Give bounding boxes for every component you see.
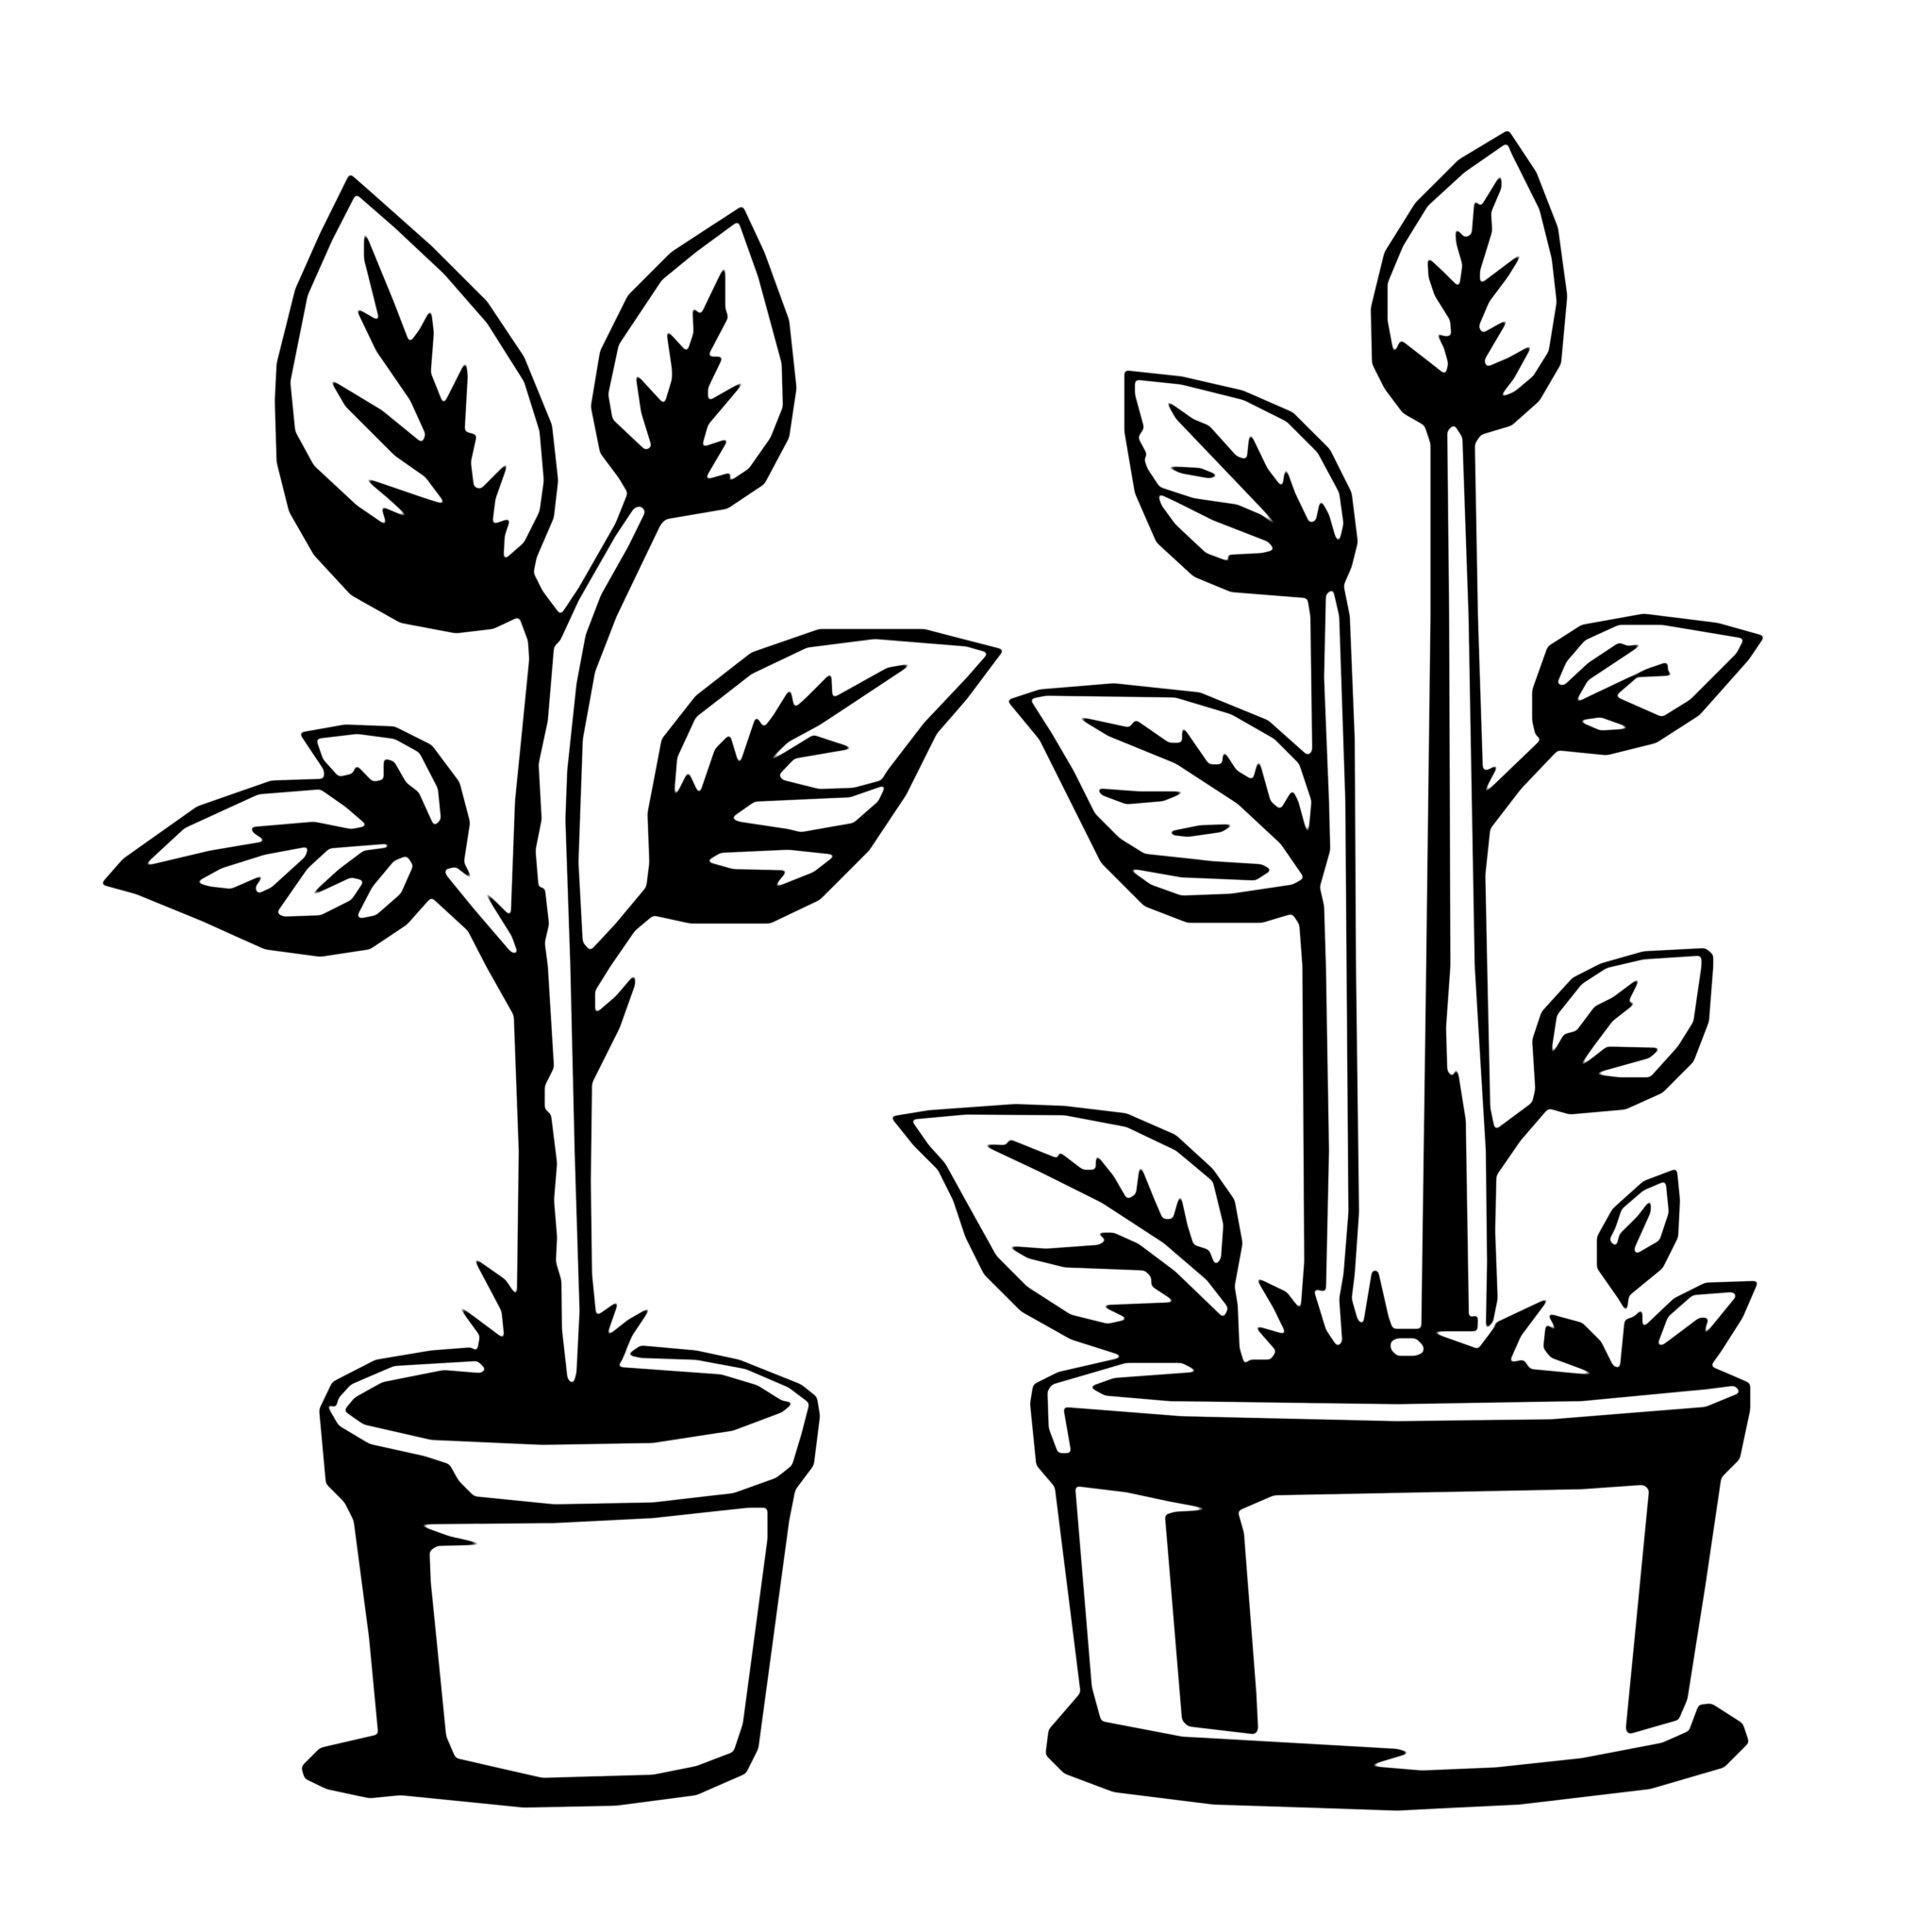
right plant: upper side leaf interior bbox=[1557, 625, 1743, 730]
right pot: body highlight bbox=[1075, 1486, 1690, 1770]
left plant: small middle leaf interior bbox=[317, 734, 441, 825]
right plant: pot, soil and lower left leaf silhouette bbox=[891, 1105, 1757, 1810]
right pot: soil pebble highlight bbox=[1391, 1339, 1424, 1356]
right plant: medium stem upper leaf interior bbox=[1136, 380, 1343, 562]
right plant: sprout leaf silhouette bbox=[1597, 1170, 1679, 1311]
left pot: rim highlight bbox=[327, 1356, 808, 1504]
left pot: body highlight bbox=[419, 1508, 767, 1777]
left plant: second top leaf interior bbox=[608, 222, 782, 482]
right pot: rim highlight bbox=[1048, 1363, 1740, 1453]
right plant: medium stem lower leaf interior bbox=[1031, 696, 1311, 895]
plant: right potted plant bbox=[891, 130, 1764, 1810]
right plant: tall stem and side leaves silhouette bbox=[1372, 130, 1764, 1331]
right plant: medium stem highlight bbox=[1314, 590, 1348, 1346]
left plant: lower left leaf interior bbox=[144, 790, 518, 954]
left plant: right leaf interior bbox=[675, 640, 988, 887]
left plant silhouette bbox=[102, 175, 1003, 1807]
plant: left potted plant bbox=[102, 175, 1003, 1807]
right plant: tall stem highlight bbox=[1446, 425, 1496, 1349]
right plant: medium stem and two leaves silhouette bbox=[1008, 371, 1397, 1343]
left plant: stem highlight bbox=[536, 507, 645, 1384]
right plant: lower side leaf interior bbox=[1551, 957, 1701, 1077]
left plant: large top leaf interior bbox=[291, 194, 543, 559]
right plant: sprout leaf interior bbox=[1609, 1182, 1668, 1254]
right plant: big lower left leaf interior bbox=[912, 1115, 1228, 1324]
right plant: low corner leaf interior bbox=[1657, 1292, 1736, 1345]
right plant: top leaf interior bbox=[1388, 143, 1557, 397]
